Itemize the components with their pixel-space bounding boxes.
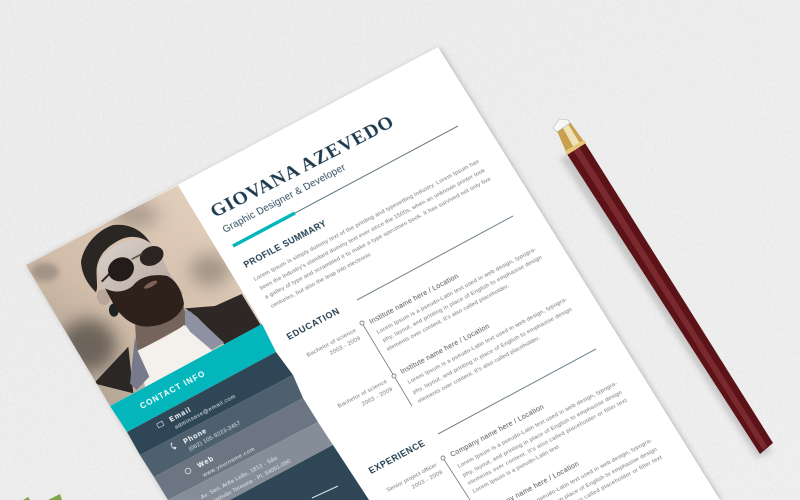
- education date 1: Bachelor of science: [306, 328, 357, 359]
- contact band: phone: [140, 375, 303, 477]
- timeline: education: [360, 321, 412, 406]
- experience entry 1: Company name here / Location: [449, 404, 546, 459]
- subtitle: Graphic Designer & Developer: [221, 162, 348, 236]
- contact band: dark lower: [230, 445, 369, 500]
- education date 1: 2003 - 2009: [329, 336, 362, 357]
- heading: contact info: CONTACT INFO: [138, 370, 206, 411]
- text block: profile summary: Lorem Ipsum is simply dummy text of the printing and typesetting industry. Lorem Ipsum has: [253, 159, 480, 283]
- contact band: address: [168, 422, 333, 500]
- experience entry 1: Lorem Ipsum is a pseudo-Latin text used in web design, typogra-: [457, 381, 618, 470]
- collar left: [130, 337, 149, 390]
- panel: contact info: [110, 324, 369, 500]
- education entry 2: phy, layout, and printing in place of English to emphasise design: [412, 307, 573, 396]
- heading: education: EDUCATION: [285, 306, 341, 342]
- contact: phone: Phone: [182, 427, 208, 446]
- contact band: email: [127, 352, 293, 455]
- heading rule with teal accent: [233, 126, 458, 246]
- neck: [135, 305, 188, 352]
- hair: [81, 225, 151, 292]
- education entry 1: phy, layout, and printing in place of English to emphasise design: [382, 255, 543, 344]
- experience rule: [438, 349, 596, 434]
- heading: profile summary: PROFILE SUMMARY: [242, 218, 328, 270]
- text block: profile summary: centuries, but also the leap into electronic: [270, 252, 373, 310]
- experience entry 1: elements over content. It's also called placeholder or filler text: [467, 398, 629, 487]
- face: [98, 240, 184, 302]
- jacket left: [94, 347, 133, 393]
- contact band: web: [154, 398, 318, 500]
- education entry 2: Lorem Ipsum is a pseudo-Latin text used in web design, typogra-: [407, 297, 568, 386]
- experience date 1: Senior project officer: [386, 463, 438, 494]
- collar right: [185, 310, 224, 350]
- resume page: [26, 47, 722, 500]
- education entry 1: Lorem Ipsum is a pseudo-Latin text used in web design, typogra-: [376, 247, 537, 336]
- text block: profile summary: a galley of type and scrambled it to make a type specimen book. It has survived not only five: [264, 177, 492, 301]
- text block: profile summary: been the industry's standard dummy text ever since the 1500s, when an unknown printer took: [259, 168, 486, 292]
- timeline: experience: [441, 456, 470, 500]
- title: name: GIOVANA AZEVEDO: [207, 112, 398, 222]
- icon: plant leaves: [23, 494, 62, 500]
- white shirt: [137, 325, 213, 387]
- ear: [96, 290, 110, 305]
- contact: web: Web: [196, 455, 216, 470]
- contact: phone: (062) 105-9223-3457: [188, 421, 242, 453]
- earring gauge: [109, 303, 119, 317]
- education entry 1: Institute name here / Location: [368, 273, 460, 326]
- sunglasses: [101, 246, 164, 282]
- portrait: bearded man with sunglasses: [81, 225, 262, 393]
- panel: portrait photo: [26, 185, 262, 406]
- experience entry 1: Lorem Ipsum is a pseudo-Latin text: [472, 444, 561, 495]
- education date 2: Bachelor of science: [337, 379, 388, 410]
- contact: address: Av. Sen. Arêa Leão, 1812 - São: [200, 456, 279, 500]
- education rule: [357, 216, 513, 300]
- contact: email: Email: [168, 406, 192, 424]
- contact band: teal heading: [110, 324, 276, 432]
- icon: phone: [170, 442, 176, 450]
- education date 2: 2003 - 2009: [361, 387, 394, 408]
- contact: email: adminsave@email.com: [174, 394, 237, 431]
- education entry 1: elements over content. It's also called placeholder.: [386, 283, 511, 353]
- contact: web: www.yourname.com: [201, 446, 256, 479]
- education entry 2: elements over content. It's also called placeholder.: [417, 335, 542, 405]
- icon: envelope: [157, 421, 164, 428]
- experience entry 1: phy, layout, and printing in place of English to emphasise design: [462, 390, 623, 479]
- lips: [144, 280, 158, 289]
- jacket right: [185, 294, 262, 345]
- experience date 1: 2003 - 2009: [411, 470, 444, 491]
- education entry 2: Institute name here / Location: [399, 323, 491, 376]
- heading: experience: EXPERIENCE: [367, 438, 427, 476]
- pencil: [553, 119, 773, 458]
- icon: globe: [185, 468, 191, 474]
- beard: [105, 275, 184, 327]
